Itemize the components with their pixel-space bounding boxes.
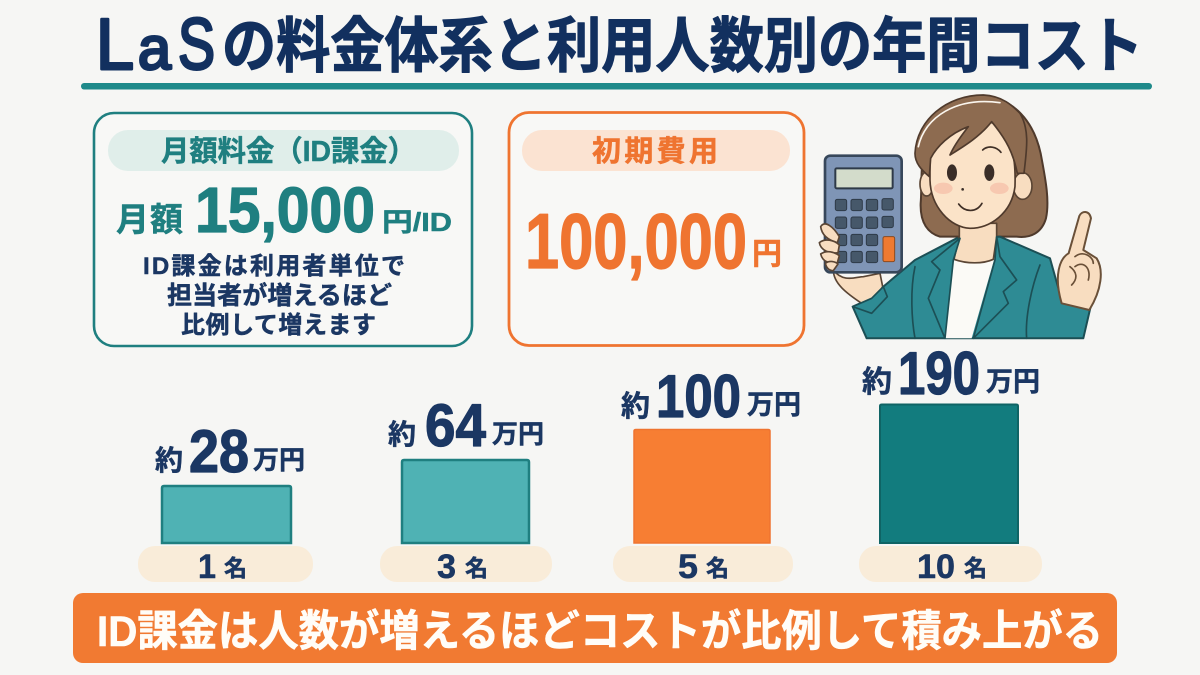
bar: 1 user: 1: [198, 548, 216, 586]
monthly price: 月額: [116, 201, 183, 238]
bar: 5 users: 100: [656, 363, 741, 430]
left hand under calculator: [833, 270, 883, 305]
hair front: [915, 95, 1027, 177]
monthly fee explanation: ID課金は利用者単位で: [143, 253, 405, 280]
panel: initial cost: [509, 112, 804, 346]
monthly price: 円/ID: [382, 207, 452, 237]
initial cost heading pill: 初期費用: [592, 135, 718, 168]
bar: 3 users: 名: [465, 555, 488, 581]
jacket: [853, 237, 1091, 338]
eyes: [947, 164, 994, 191]
illustration: woman holding calculator and pointing up: [819, 95, 1101, 338]
bar: 1 user: 名: [224, 555, 247, 581]
title: S: [178, 5, 215, 85]
monthly fee heading pill: 月額料金（ID課金）: [161, 135, 416, 168]
eyebrow and smile: [959, 147, 1001, 210]
bar: 10 users: 約: [862, 366, 892, 399]
bar: 10 users: [859, 340, 1042, 586]
cheeks: [934, 183, 1009, 194]
monthly price: 15,000: [195, 174, 375, 246]
bar: 10 users: 190: [898, 340, 980, 407]
bar: 3 users: 万円: [492, 419, 544, 449]
ears: [920, 172, 1032, 199]
bar: 5 users: 名: [706, 555, 729, 581]
bar: 3 users: 約: [388, 419, 416, 450]
initial cost heading pill: [522, 130, 790, 171]
bar chart: annual cost by users: [138, 340, 1042, 586]
title: L: [96, 5, 134, 85]
initial cost amount: 100,000: [525, 197, 747, 285]
hair highlight: [918, 102, 1000, 147]
monthly fee explanation: [143, 253, 405, 339]
calculator: [825, 156, 902, 272]
monthly fee explanation: 比例して増えます: [181, 312, 376, 339]
jacket lapels: [912, 237, 1040, 338]
panel: monthly fee: [94, 113, 472, 346]
left cuff: [853, 287, 887, 313]
bar: 3 users: 3: [437, 548, 456, 586]
bar: 5 users: [613, 363, 801, 586]
monthly fee heading pill: [108, 130, 459, 171]
bar: 1 user: 約: [155, 445, 183, 476]
bar: 5 users: 約: [621, 390, 650, 423]
bar: 10 users: 10: [917, 548, 955, 586]
bar: 5 users: 5: [678, 548, 698, 586]
bottom banner: [73, 593, 1117, 663]
bar: 1 user: 28: [189, 418, 249, 485]
bar: 5 users: 万円: [747, 390, 801, 420]
pointing hand: [1058, 212, 1101, 310]
face: [930, 122, 1015, 228]
bar: 1 user: 万円: [253, 445, 305, 475]
hair back: [921, 96, 1047, 237]
neck: [954, 223, 997, 263]
bottom banner: ID課金は人数が増えるほどコストが比例して積み上がる: [97, 608, 1103, 656]
monthly fee explanation: 担当者が増えるほど: [167, 281, 392, 310]
title: a: [138, 15, 172, 82]
bar: 3 users: [380, 392, 552, 586]
shirt: [945, 257, 995, 338]
left hand fingers: [819, 224, 839, 271]
bar: 1 user: [138, 418, 313, 586]
initial cost amount: 円: [752, 238, 782, 271]
bar: 10 users: 名: [964, 555, 987, 581]
monthly price: [116, 174, 452, 246]
bar: 3 users: 64: [425, 392, 487, 459]
bar: 10 users: 万円: [986, 367, 1040, 397]
